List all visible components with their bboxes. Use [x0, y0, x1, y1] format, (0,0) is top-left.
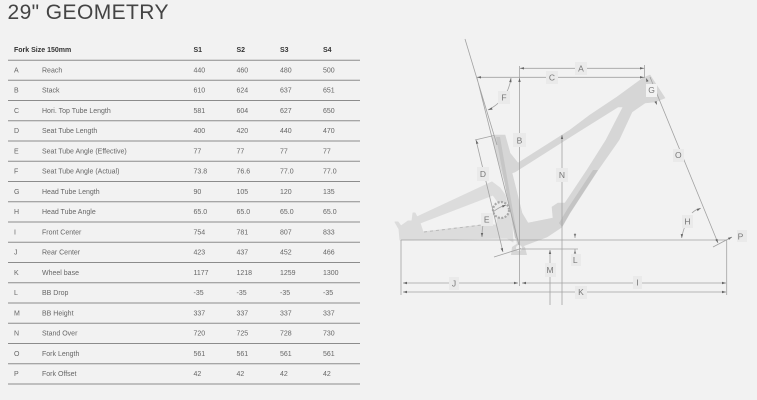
label B: [513, 133, 526, 147]
bike geometry diagram: [395, 39, 747, 305]
row G: 90: [194, 189, 201, 196]
row L: [14, 290, 333, 297]
row E: [14, 148, 331, 156]
row N: 720: [194, 331, 205, 338]
row F: F: [14, 169, 18, 176]
row D: 420: [236, 128, 248, 135]
row M: 337: [194, 310, 205, 318]
row J: Rear Center: [42, 250, 81, 257]
row G: G: [14, 189, 19, 196]
row I: 807: [280, 230, 292, 236]
row N: [14, 331, 335, 338]
downtube shading: [559, 170, 598, 227]
row H: 65.0: [280, 209, 294, 216]
row K: 1259: [280, 270, 296, 277]
label N: [556, 168, 568, 182]
row I: 833: [323, 230, 335, 236]
label H: H: [684, 216, 691, 226]
row B: 624: [236, 88, 248, 95]
row L: BB Drop: [42, 290, 69, 297]
row C: 581: [194, 108, 205, 115]
row H: 65.0: [323, 209, 337, 216]
row G: 105: [236, 189, 248, 196]
seat tube shading: [496, 137, 518, 240]
row O: 561: [194, 351, 205, 358]
row A: 460: [236, 68, 248, 74]
row G: 135: [323, 189, 335, 196]
row N: 730: [323, 331, 335, 338]
row A: A: [14, 68, 19, 74]
row G: 120: [280, 189, 292, 196]
row O: 561: [280, 351, 292, 358]
row B: 651: [323, 88, 335, 95]
row B: 610: [194, 88, 205, 95]
table header row: Fork Size 150mm: [14, 47, 71, 54]
row A: Reach: [42, 68, 62, 74]
label J: J: [452, 278, 456, 288]
row P: 42: [323, 371, 331, 378]
row L: -35: [280, 290, 290, 297]
label I: I: [636, 278, 639, 288]
row I: 754: [194, 230, 205, 236]
row E: 77: [194, 148, 201, 156]
row L: -35: [323, 290, 333, 297]
label A: A: [578, 63, 584, 73]
chainring: [493, 202, 509, 218]
label M: [545, 263, 556, 277]
row P: P: [14, 371, 19, 378]
label H: [682, 215, 693, 228]
row J: 437: [236, 250, 248, 257]
row P: 42: [280, 371, 288, 378]
row J: 423: [194, 250, 205, 257]
label E: [481, 213, 493, 226]
row F: Seat Tube Angle (Actual): [42, 169, 119, 176]
label G: G: [648, 85, 655, 95]
row K: K: [14, 270, 19, 277]
label P: P: [738, 231, 744, 241]
row J: 466: [323, 250, 335, 257]
row J: J: [14, 250, 18, 257]
row O: 561: [323, 351, 335, 358]
row L: L: [14, 290, 18, 297]
label F: F: [501, 92, 507, 102]
label C: C: [549, 72, 555, 82]
row I: Front Center: [42, 230, 82, 236]
row N: 728: [280, 331, 292, 338]
row E: Seat Tube Angle (Effective): [42, 148, 127, 156]
bike frame: [395, 75, 665, 255]
row L: -35: [236, 290, 247, 297]
row F: 77.0: [280, 169, 294, 176]
label P: [737, 230, 747, 242]
row E: 77: [280, 148, 288, 156]
row P: 42: [194, 371, 201, 378]
label M: M: [546, 265, 554, 275]
label I: [633, 276, 642, 289]
row H: 65.0: [194, 209, 207, 216]
table header row: [14, 47, 332, 54]
row L: -35: [194, 290, 204, 297]
label J: [449, 277, 459, 290]
row M: 337: [280, 310, 292, 318]
label K: [575, 286, 587, 299]
row M: 337: [236, 310, 248, 318]
row F: [14, 169, 337, 176]
row B: Stack: [42, 88, 60, 95]
label D: D: [480, 169, 486, 179]
row A: [14, 68, 335, 74]
row D: 470: [323, 128, 335, 135]
label B: B: [517, 135, 523, 145]
row H: Head Tube Angle: [42, 209, 96, 216]
label G: [646, 84, 657, 97]
row D: 440: [280, 128, 292, 135]
label D: [477, 167, 489, 181]
row A: 440: [194, 68, 205, 74]
row M: BB Height: [42, 310, 74, 318]
row O: Fork Length: [42, 351, 79, 358]
row M: [14, 310, 335, 318]
row I: I: [14, 230, 16, 236]
row P: 42: [236, 371, 244, 378]
row I: 781: [236, 230, 248, 236]
row P: Fork Offset: [42, 371, 77, 378]
row H: H: [14, 209, 19, 216]
table header row: S1: [194, 47, 202, 54]
row E: 77: [323, 148, 331, 156]
row C: 604: [236, 108, 248, 115]
label K: K: [578, 287, 584, 297]
label O: [673, 149, 684, 162]
label L: L: [573, 255, 578, 265]
row E: E: [14, 148, 19, 156]
chainstay detail: [424, 225, 482, 232]
row C: C: [14, 108, 19, 115]
row C: 627: [280, 108, 292, 115]
dimension lines: [401, 39, 732, 305]
row H: [14, 209, 337, 216]
row D: [14, 128, 335, 135]
row K: [14, 270, 339, 277]
row M: M: [14, 310, 20, 318]
row D: 400: [194, 128, 205, 135]
row N: 725: [236, 331, 248, 338]
label E: E: [484, 215, 490, 225]
row K: 1177: [194, 270, 209, 277]
row B: [14, 88, 335, 95]
geometry table: [8, 47, 360, 384]
row A: 500: [323, 68, 335, 74]
row C: [14, 108, 335, 115]
row J: 452: [280, 250, 292, 257]
label O: O: [675, 150, 682, 160]
label F: [498, 91, 510, 104]
row A: 480: [280, 68, 292, 74]
row O: O: [14, 351, 20, 358]
row F: 73.8: [194, 169, 207, 176]
row K: 1300: [323, 270, 339, 277]
rear triangle: [395, 182, 513, 242]
label A: [575, 62, 587, 75]
row N: N: [14, 331, 19, 338]
row D: Seat Tube Length: [42, 128, 97, 135]
title: 29" GEOMETRY: [8, 1, 168, 24]
row G: Head Tube Length: [42, 189, 100, 196]
row B: B: [14, 88, 19, 95]
row I: [14, 230, 335, 236]
row P: [14, 371, 331, 378]
row O: [14, 351, 335, 358]
row D: D: [14, 128, 19, 135]
front triangle: [492, 75, 665, 248]
label C: [546, 71, 558, 84]
row F: 76.6: [236, 169, 250, 176]
row M: 337: [323, 310, 335, 318]
row J: [14, 250, 335, 257]
table header row: S4: [323, 47, 332, 54]
row C: Hori. Top Tube Length: [42, 108, 111, 115]
bottom bracket: [511, 243, 527, 255]
table header row: S2: [236, 47, 245, 54]
label L: [571, 254, 581, 266]
row H: 65.0: [236, 209, 250, 216]
table header row: S3: [280, 47, 289, 54]
row N: Stand Over: [42, 331, 78, 338]
row K: 1218: [236, 270, 252, 277]
row F: 77.0: [323, 169, 337, 176]
row K: Wheel base: [42, 270, 79, 277]
row G: [14, 189, 335, 196]
row O: 561: [236, 351, 248, 358]
row C: 650: [323, 108, 335, 115]
label N: N: [559, 170, 565, 180]
row B: 637: [280, 88, 292, 95]
row E: 77: [236, 148, 244, 156]
